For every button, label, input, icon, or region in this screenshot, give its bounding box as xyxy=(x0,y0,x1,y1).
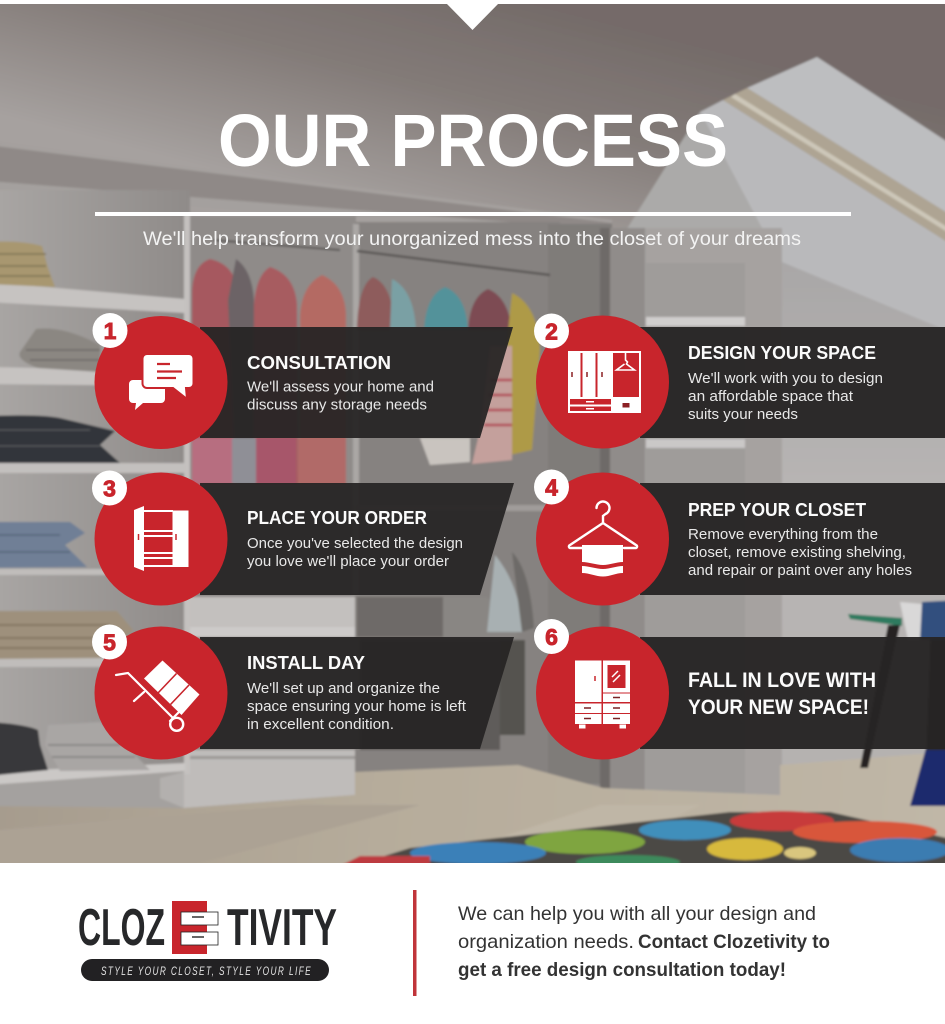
logo red E drawers xyxy=(172,901,218,954)
call to action text: We can help you with all your design and xyxy=(458,903,816,925)
icon: open cabinet xyxy=(134,506,188,571)
vertical panels xyxy=(184,214,190,774)
banner xyxy=(200,637,514,749)
description: and repair or paint over any holes xyxy=(688,563,912,579)
icon: wardrobe xyxy=(568,351,641,413)
hanging shirts lower xyxy=(357,597,443,637)
call to action text: Contact Clozetivity to xyxy=(638,931,830,953)
call to action text: get a free design consultation today! xyxy=(458,959,786,981)
ceiling xyxy=(0,0,945,304)
table xyxy=(848,614,902,626)
number badge 6 xyxy=(534,619,569,654)
logo wordmark left: CLOZ xyxy=(78,899,165,957)
tagline: STYLE YOUR CLOSET, STYLE YOUR LIFE xyxy=(101,964,312,978)
red circle xyxy=(94,472,228,606)
number badge 4 xyxy=(534,470,569,504)
number badge 2: 2 xyxy=(545,318,558,344)
step 5: install day xyxy=(92,624,514,760)
skylight glass xyxy=(747,57,945,221)
number badge 4: 4 xyxy=(545,474,558,500)
red circle xyxy=(94,316,228,449)
left bottom panel xyxy=(0,771,185,808)
red circle xyxy=(536,626,669,760)
icon: hand truck xyxy=(116,660,200,731)
desk items xyxy=(900,602,926,640)
description: in excellent condition. xyxy=(247,717,394,733)
tagline pill xyxy=(81,959,329,981)
shelves xyxy=(0,282,185,313)
description: an affordable space that xyxy=(688,389,853,405)
lower rail xyxy=(355,505,560,511)
number badge 5: 5 xyxy=(103,630,116,656)
subtitle: We'll help transform your unorganized mess into the closet of your dreams xyxy=(143,229,801,250)
number badge 6: 6 xyxy=(545,624,558,650)
hanging rails xyxy=(357,251,550,275)
heading: INSTALL DAY xyxy=(247,653,365,673)
number badge 1: 1 xyxy=(104,318,117,344)
logo wordmark right: TIVITY xyxy=(227,899,337,957)
hanging shirts upper left xyxy=(192,259,240,485)
description: you love we'll place your order xyxy=(247,554,449,570)
white band top xyxy=(0,0,945,4)
blue pedestal xyxy=(910,748,945,806)
skylight frame xyxy=(723,88,945,250)
heading: YOUR NEW SPACE! xyxy=(688,696,869,719)
number badge 2 xyxy=(534,314,569,348)
banner xyxy=(640,483,945,595)
banner xyxy=(200,327,513,438)
number badge 3 xyxy=(92,470,127,506)
step 3: place your order xyxy=(92,470,514,606)
step 1: consultation xyxy=(92,313,513,449)
icon: cabinet with drawers xyxy=(575,660,630,728)
description: We'll work with you to design xyxy=(688,371,883,387)
description: suits your needs xyxy=(688,407,798,423)
banner xyxy=(200,483,514,595)
description: Once you've selected the design xyxy=(247,536,463,552)
number badge 1 xyxy=(92,313,128,348)
title: OUR PROCESS xyxy=(218,99,728,182)
call to action text: organization needs. xyxy=(458,931,634,953)
banner xyxy=(640,637,945,749)
notch triangle xyxy=(446,3,499,30)
soffit band xyxy=(0,141,612,232)
heading: PREP YOUR CLOSET xyxy=(688,500,866,520)
icon: speech bubbles xyxy=(129,354,194,410)
number badge 5 xyxy=(92,624,127,660)
red circle xyxy=(536,472,669,606)
heading: FALL IN LOVE WITH xyxy=(688,669,876,692)
description: closet, remove existing shelving, xyxy=(688,545,906,561)
folded stacks xyxy=(0,242,55,287)
hanging area backs xyxy=(188,216,356,816)
rug xyxy=(320,812,945,876)
heading: CONSULTATION xyxy=(247,353,391,373)
footer panel xyxy=(0,863,945,1024)
logo xyxy=(78,899,337,981)
description: space ensuring your home is left xyxy=(247,699,466,715)
red circle xyxy=(536,316,669,448)
floor xyxy=(0,751,945,876)
description: discuss any storage needs xyxy=(247,398,427,414)
left closet lower drawers xyxy=(184,750,355,808)
left shelving back wall xyxy=(0,190,190,810)
icon: hanger with towel xyxy=(569,502,637,576)
description: We'll set up and organize the xyxy=(247,681,440,697)
right wall xyxy=(782,262,945,770)
heading: DESIGN YOUR SPACE xyxy=(688,343,876,363)
hanging shirts upper right xyxy=(357,277,395,330)
door panel xyxy=(600,228,612,793)
description: We'll assess your home and xyxy=(247,380,434,396)
red circle xyxy=(94,626,228,760)
banner xyxy=(640,327,945,438)
step 6: fall in love xyxy=(534,619,945,760)
title rule xyxy=(95,212,851,216)
heading: PLACE YOUR ORDER xyxy=(247,508,427,528)
number badge 3: 3 xyxy=(103,476,116,502)
step 4: prep your closet xyxy=(534,470,945,606)
step 2: design your space xyxy=(534,314,945,448)
footer divider xyxy=(413,890,416,996)
description: Remove everything from the xyxy=(688,527,878,543)
sloped wall reveal xyxy=(700,100,945,338)
